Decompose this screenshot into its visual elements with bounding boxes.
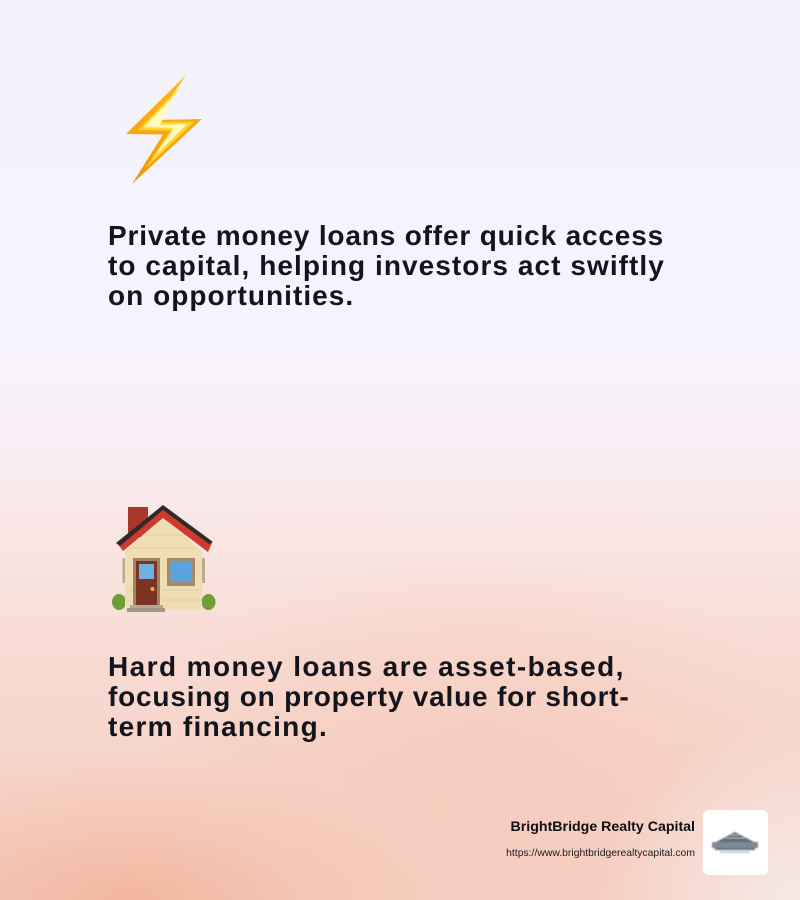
walls — [125, 516, 202, 610]
footer: url: https://www.brightbridgerealtycapital.com — [506, 848, 695, 859]
text block: private money loans — [108, 220, 665, 311]
text block: hard money loans: Hard money loans are asset-based, — [108, 651, 625, 682]
steps — [130, 605, 163, 608]
text block: private money loans: on opportunities. — [108, 280, 354, 311]
side shutters — [122, 558, 126, 583]
text block: hard money loans: focusing on property value for short- — [108, 681, 630, 712]
footer: brand name: BrightBridge Realty Capital — [511, 819, 695, 835]
door frame — [133, 558, 160, 606]
icon: house — [112, 505, 216, 612]
shrubs — [112, 594, 126, 610]
text block: hard money loans — [108, 651, 630, 742]
window — [167, 558, 195, 586]
logo mark — [711, 831, 759, 854]
roof — [117, 507, 212, 552]
icon: lightning bolt — [126, 75, 202, 184]
chimney — [128, 507, 148, 537]
text block: hard money loans: term financing. — [108, 711, 328, 742]
text block: private money loans: to capital, helping investors act swiftly — [108, 250, 665, 281]
text block: private money loans: Private money loans offer quick access — [108, 220, 664, 251]
footer: logo card — [703, 810, 768, 875]
